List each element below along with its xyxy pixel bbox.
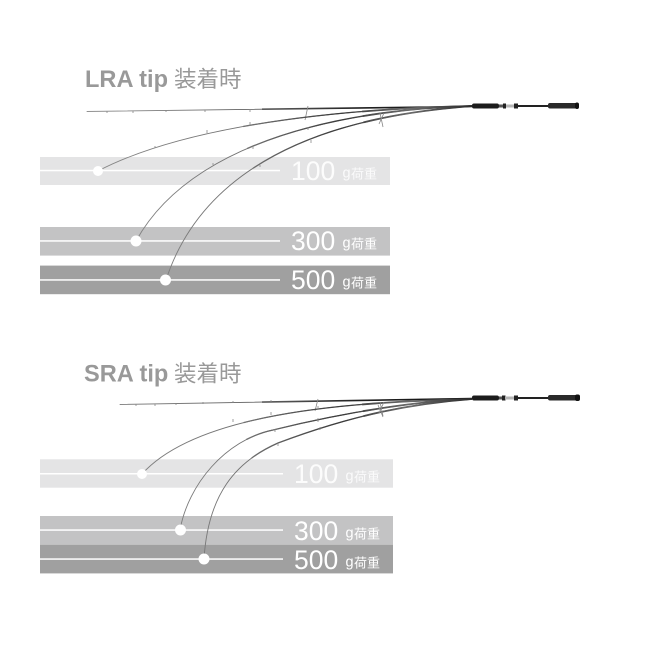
load marker: 500 g — [160, 274, 171, 286]
rod: 300 g bend — [136, 106, 472, 241]
load band: 300 g: g — [342, 236, 351, 252]
load band: 500 g: 荷重 — [351, 276, 377, 290]
load band: 500 g — [40, 545, 393, 575]
rod: 100 g bend — [142, 399, 472, 474]
load band: 100 g: 100 — [291, 156, 335, 186]
load band: 500 g: g — [346, 554, 354, 570]
load marker: 300 g — [130, 236, 142, 246]
panel: LRA tip — [40, 67, 579, 295]
rod: 500 g bend — [204, 399, 472, 559]
load band: 100 g: g — [346, 468, 354, 484]
load band: 100 g — [40, 459, 393, 489]
rod: 100 g bend — [98, 106, 472, 171]
rod: unloaded — [87, 106, 472, 120]
load band: 100 g: 荷重 — [351, 166, 377, 182]
load band: 500 g — [40, 265, 390, 295]
load marker: 500 g — [198, 554, 210, 564]
load marker: 300 g — [175, 524, 186, 536]
rod: 500 g bend — [166, 106, 472, 280]
rod: unloaded — [120, 398, 472, 411]
load band: 100 g: 100 — [294, 459, 338, 489]
panel: SRA tip — [40, 362, 580, 575]
load band: 500 g: 500 — [294, 545, 338, 575]
heading: SRA tip: SRA tip — [84, 362, 168, 388]
load band: 300 g: 荷重 — [351, 236, 377, 252]
heading: LRA tip: LRA tip — [85, 67, 168, 93]
load band: 100 g: g — [342, 166, 351, 182]
heading: SRA tip: 装着時 — [174, 362, 242, 386]
rod handle — [472, 102, 579, 109]
load band: 300 g: 荷重 — [354, 526, 380, 542]
load marker: 100 g — [137, 469, 147, 479]
load band: 500 g: 500 — [291, 265, 335, 295]
load band: 300 g: g — [346, 526, 354, 542]
rod: 300 g bend — [180, 399, 472, 530]
load band: 100 g — [40, 156, 390, 186]
load band: 300 g — [40, 516, 393, 546]
load marker: 100 g — [93, 166, 103, 176]
heading: LRA tip: 装着時 — [174, 67, 242, 92]
load band: 300 g: 300 — [294, 516, 338, 546]
load band: 300 g: 300 — [291, 226, 335, 256]
rod handle — [472, 394, 580, 401]
load band: 500 g: g — [342, 274, 351, 290]
load band: 100 g: 荷重 — [354, 470, 380, 484]
load band: 300 g — [40, 226, 390, 256]
load band: 500 g: 荷重 — [354, 556, 380, 570]
